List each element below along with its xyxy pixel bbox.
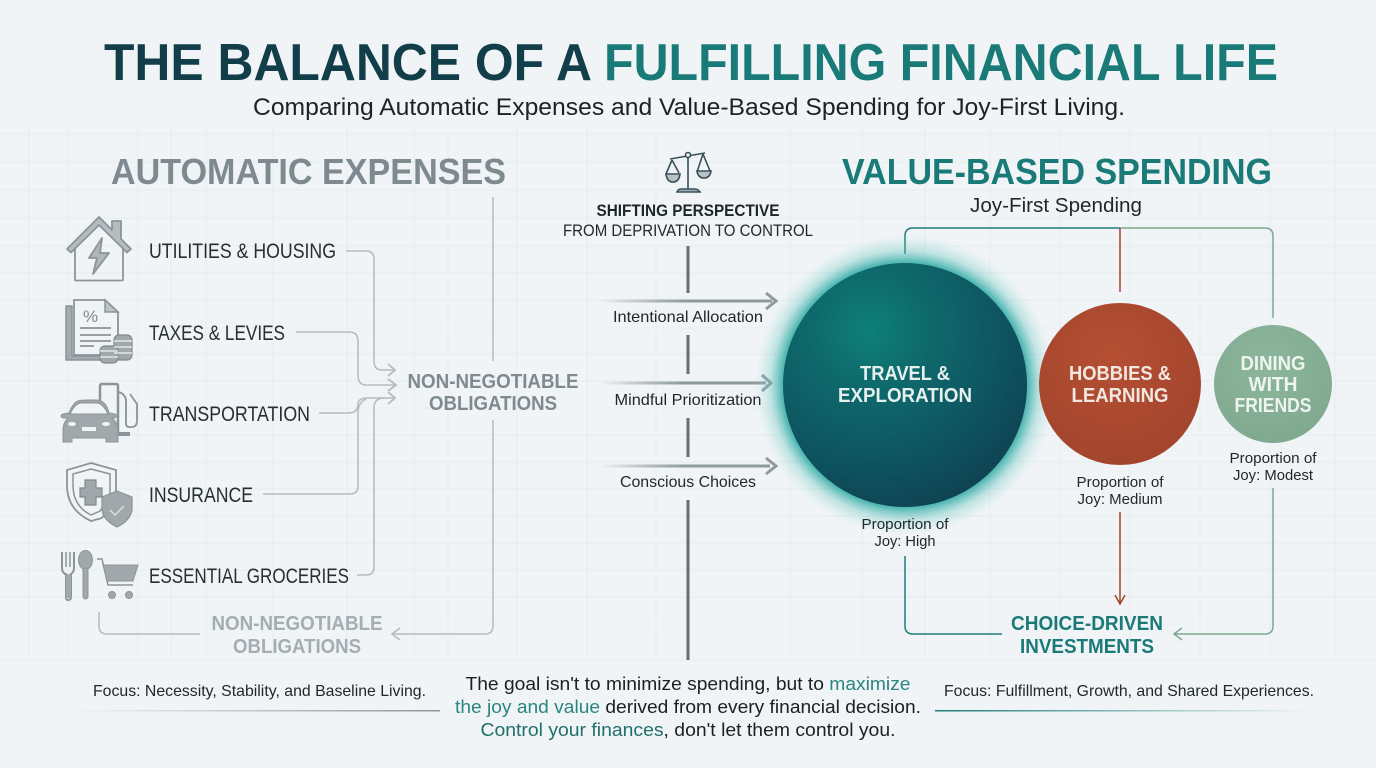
closing statement: Control your finances , don't let them control you. <box>480 719 896 740</box>
label: non-negotiable obligations lower: NON-NEGOTIABLE <box>212 613 382 635</box>
closing statement: The goal isn't to minimize spending, but to maximize <box>465 673 910 694</box>
divider left <box>70 710 440 712</box>
title <box>104 34 1278 92</box>
icon: tax document with coins: % <box>83 307 98 326</box>
circle: dining with friends: DINING <box>1240 353 1306 375</box>
label: taxes and levies: TAXES & LEVIES <box>149 322 285 345</box>
connector arrows to obligations <box>263 251 396 575</box>
circle: hobbies and learning: HOBBIES & <box>1069 363 1171 385</box>
icon: cutlery and cart <box>62 550 138 600</box>
circle: travel and exploration: TRAVEL & <box>860 363 950 385</box>
label: choice-driven investments <box>1011 613 1163 658</box>
label: non-negotiable obligations center <box>408 371 578 415</box>
label: non-negotiable obligations center: OBLIGATIONS <box>429 393 557 415</box>
caption: joy high: Joy: High <box>874 533 936 550</box>
circle: hobbies and learning <box>1039 303 1201 465</box>
caption: joy medium: Joy: Medium <box>1078 491 1162 508</box>
caption: joy modest: Joy: Modest <box>1233 467 1314 484</box>
arrow: conscious choices <box>600 458 776 474</box>
connector: arrows to investments <box>905 488 1273 640</box>
heading: value-based spending: VALUE-BASED SPENDING <box>842 151 1272 192</box>
icon: balance scale <box>666 152 711 192</box>
subheading: joy-first spending: Joy-First Spending <box>970 195 1142 217</box>
icon: car and fuel pump <box>61 384 137 442</box>
panel: automatic expenses <box>61 151 578 712</box>
subtitle: Comparing Automatic Expenses and Value-Based Spending for Joy-First Living. <box>253 94 1125 121</box>
label: transportation: TRANSPORTATION <box>149 403 310 426</box>
arrow: intentional allocation <box>600 293 776 309</box>
caption: joy modest <box>1230 450 1317 484</box>
heading: shifting perspective: SHIFTING PERSPECTIVE <box>596 201 780 220</box>
circle: dining with friends: FRIENDS <box>1234 395 1312 417</box>
closing statement <box>455 673 921 740</box>
title: THE BALANCE OF A <box>104 34 592 92</box>
label: non-negotiable obligations lower <box>212 613 382 658</box>
bracket line to lower label <box>99 197 493 640</box>
panel: shifting perspective <box>563 152 813 660</box>
heading: automatic expenses: AUTOMATIC EXPENSES <box>111 151 506 192</box>
label: non-negotiable obligations lower: OBLIGATIONS <box>233 636 361 658</box>
arrow: mindful prioritization <box>600 375 771 391</box>
circle: hobbies and learning: LEARNING <box>1072 385 1168 407</box>
label: intentional allocation: Intentional Allocation <box>613 309 763 326</box>
label: non-negotiable obligations center: NON-NEGOTIABLE <box>408 371 578 393</box>
caption: joy medium <box>1076 474 1164 508</box>
closing statement: the joy and value derived from every financial decision. <box>455 696 921 717</box>
connector: top bracket <box>905 228 1273 318</box>
central vertical axis <box>686 246 690 660</box>
title: FULFILLING FINANCIAL LIFE <box>604 34 1278 92</box>
label: insurance: INSURANCE <box>149 484 253 507</box>
caption: joy high: Proportion of <box>862 516 949 533</box>
label: mindful prioritization: Mindful Prioritization <box>614 392 762 409</box>
icon: shields <box>67 463 132 527</box>
circle: travel and exploration <box>755 235 1055 535</box>
icon: tax document with coins <box>66 300 132 363</box>
circle: dining with friends: WITH <box>1248 374 1298 396</box>
icon: house with lightning <box>67 217 131 280</box>
subheading: from deprivation to control: FROM DEPRIVATION TO CONTROL <box>563 221 813 240</box>
label: utilities and housing: UTILITIES & HOUSING <box>149 240 336 263</box>
divider right <box>935 710 1310 712</box>
circle: dining with friends <box>1214 325 1332 443</box>
label: choice-driven investments: CHOICE-DRIVEN <box>1011 613 1163 635</box>
caption: joy medium: Proportion of <box>1076 474 1164 491</box>
label: essential groceries: ESSENTIAL GROCERIES <box>149 565 349 588</box>
focus note: right: Focus: Fulfillment, Growth, and Shared Experiences. <box>944 683 1314 700</box>
focus note: left: Focus: Necessity, Stability, and Baseline Living. <box>93 683 426 700</box>
label: conscious choices: Conscious Choices <box>620 474 756 491</box>
panel: value-based spending <box>755 151 1332 712</box>
caption: joy high <box>862 516 949 550</box>
caption: joy modest: Proportion of <box>1230 450 1317 467</box>
circle: travel and exploration: EXPLORATION <box>838 385 972 407</box>
label: choice-driven investments: INVESTMENTS <box>1020 636 1154 658</box>
